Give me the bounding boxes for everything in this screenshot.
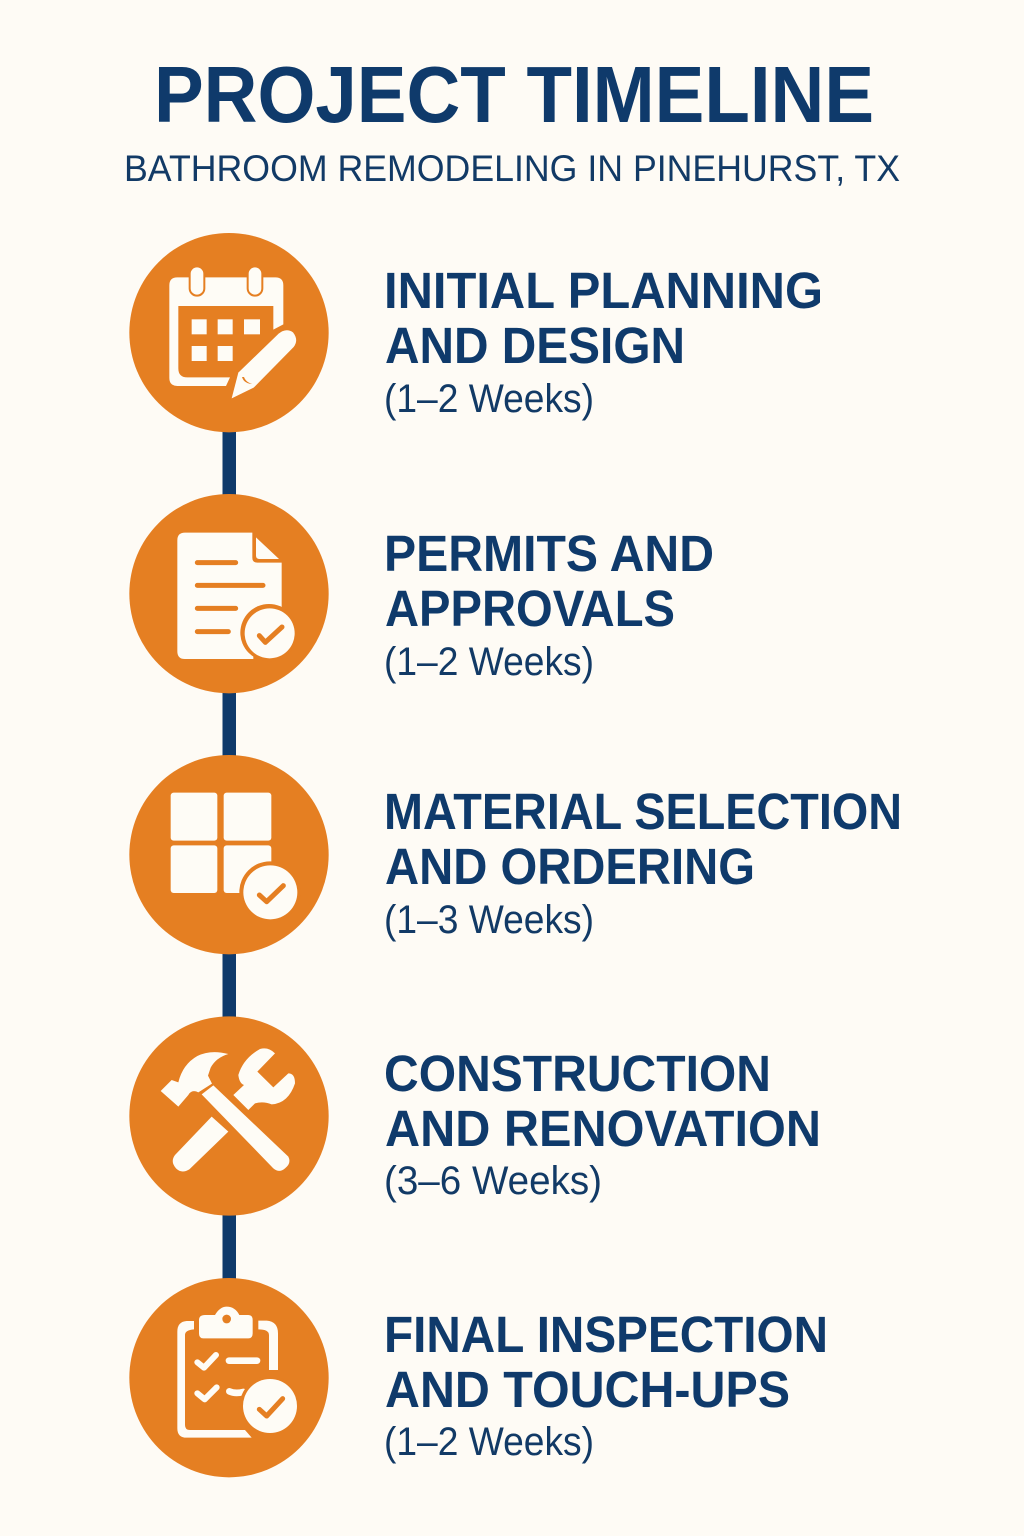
icon: clipboard with check <box>129 1278 329 1477</box>
subtitle: BATHROOM REMODELING IN PINEHURST, TX <box>124 148 900 189</box>
duration: (1–3 Weeks) <box>384 898 594 942</box>
step 4: construction and renovation <box>129 1016 821 1216</box>
heading: construction and renovation: CONSTRUCTION <box>384 1045 771 1102</box>
heading: construction and renovation: AND RENOVATION <box>385 1100 821 1157</box>
icon: crossed hammer and wrench <box>129 1016 329 1216</box>
connector: step 3 to 4 <box>222 950 236 1020</box>
duration: (1–2 Weeks) <box>384 1420 594 1464</box>
step 1: initial planning and design <box>129 233 823 432</box>
connector: step 4 to 5 <box>222 1212 236 1282</box>
heading: final inspection and touch-ups <box>384 1306 828 1418</box>
duration: (1–2 Weeks) <box>384 640 594 684</box>
duration: (3–6 Weeks) <box>384 1159 602 1203</box>
heading: material selection and ordering: MATERIAL SELECTION <box>384 783 902 840</box>
title: PROJECT TIMELINE <box>154 50 874 139</box>
step 3: material selection and ordering <box>129 755 902 954</box>
heading: initial planning and design <box>384 262 823 374</box>
step 5: final inspection and touch-ups <box>129 1278 828 1477</box>
icon: document with check <box>129 494 329 693</box>
heading: permits and approvals <box>384 525 714 637</box>
heading: construction and renovation <box>384 1045 821 1157</box>
heading: material selection and ordering <box>384 783 902 895</box>
connector: step 2 to 3 <box>222 689 236 759</box>
heading: permits and approvals: PERMITS AND <box>384 525 714 582</box>
step 2: permits and approvals <box>129 494 714 693</box>
heading: initial planning and design: AND DESIGN <box>385 317 685 374</box>
heading: initial planning and design: INITIAL PLANNING <box>384 262 823 319</box>
duration: (1–2 Weeks) <box>384 377 594 421</box>
heading: final inspection and touch-ups: FINAL INSPECTION <box>384 1306 828 1363</box>
icon: tiles with check <box>129 755 329 954</box>
heading: material selection and ordering: AND ORDERING <box>385 838 755 895</box>
heading: final inspection and touch-ups: AND TOUCH-UPS <box>385 1361 790 1418</box>
heading: permits and approvals: APPROVALS <box>385 580 675 637</box>
icon: calendar and pencil <box>129 233 329 432</box>
connector: step 1 to 2 <box>222 428 236 498</box>
